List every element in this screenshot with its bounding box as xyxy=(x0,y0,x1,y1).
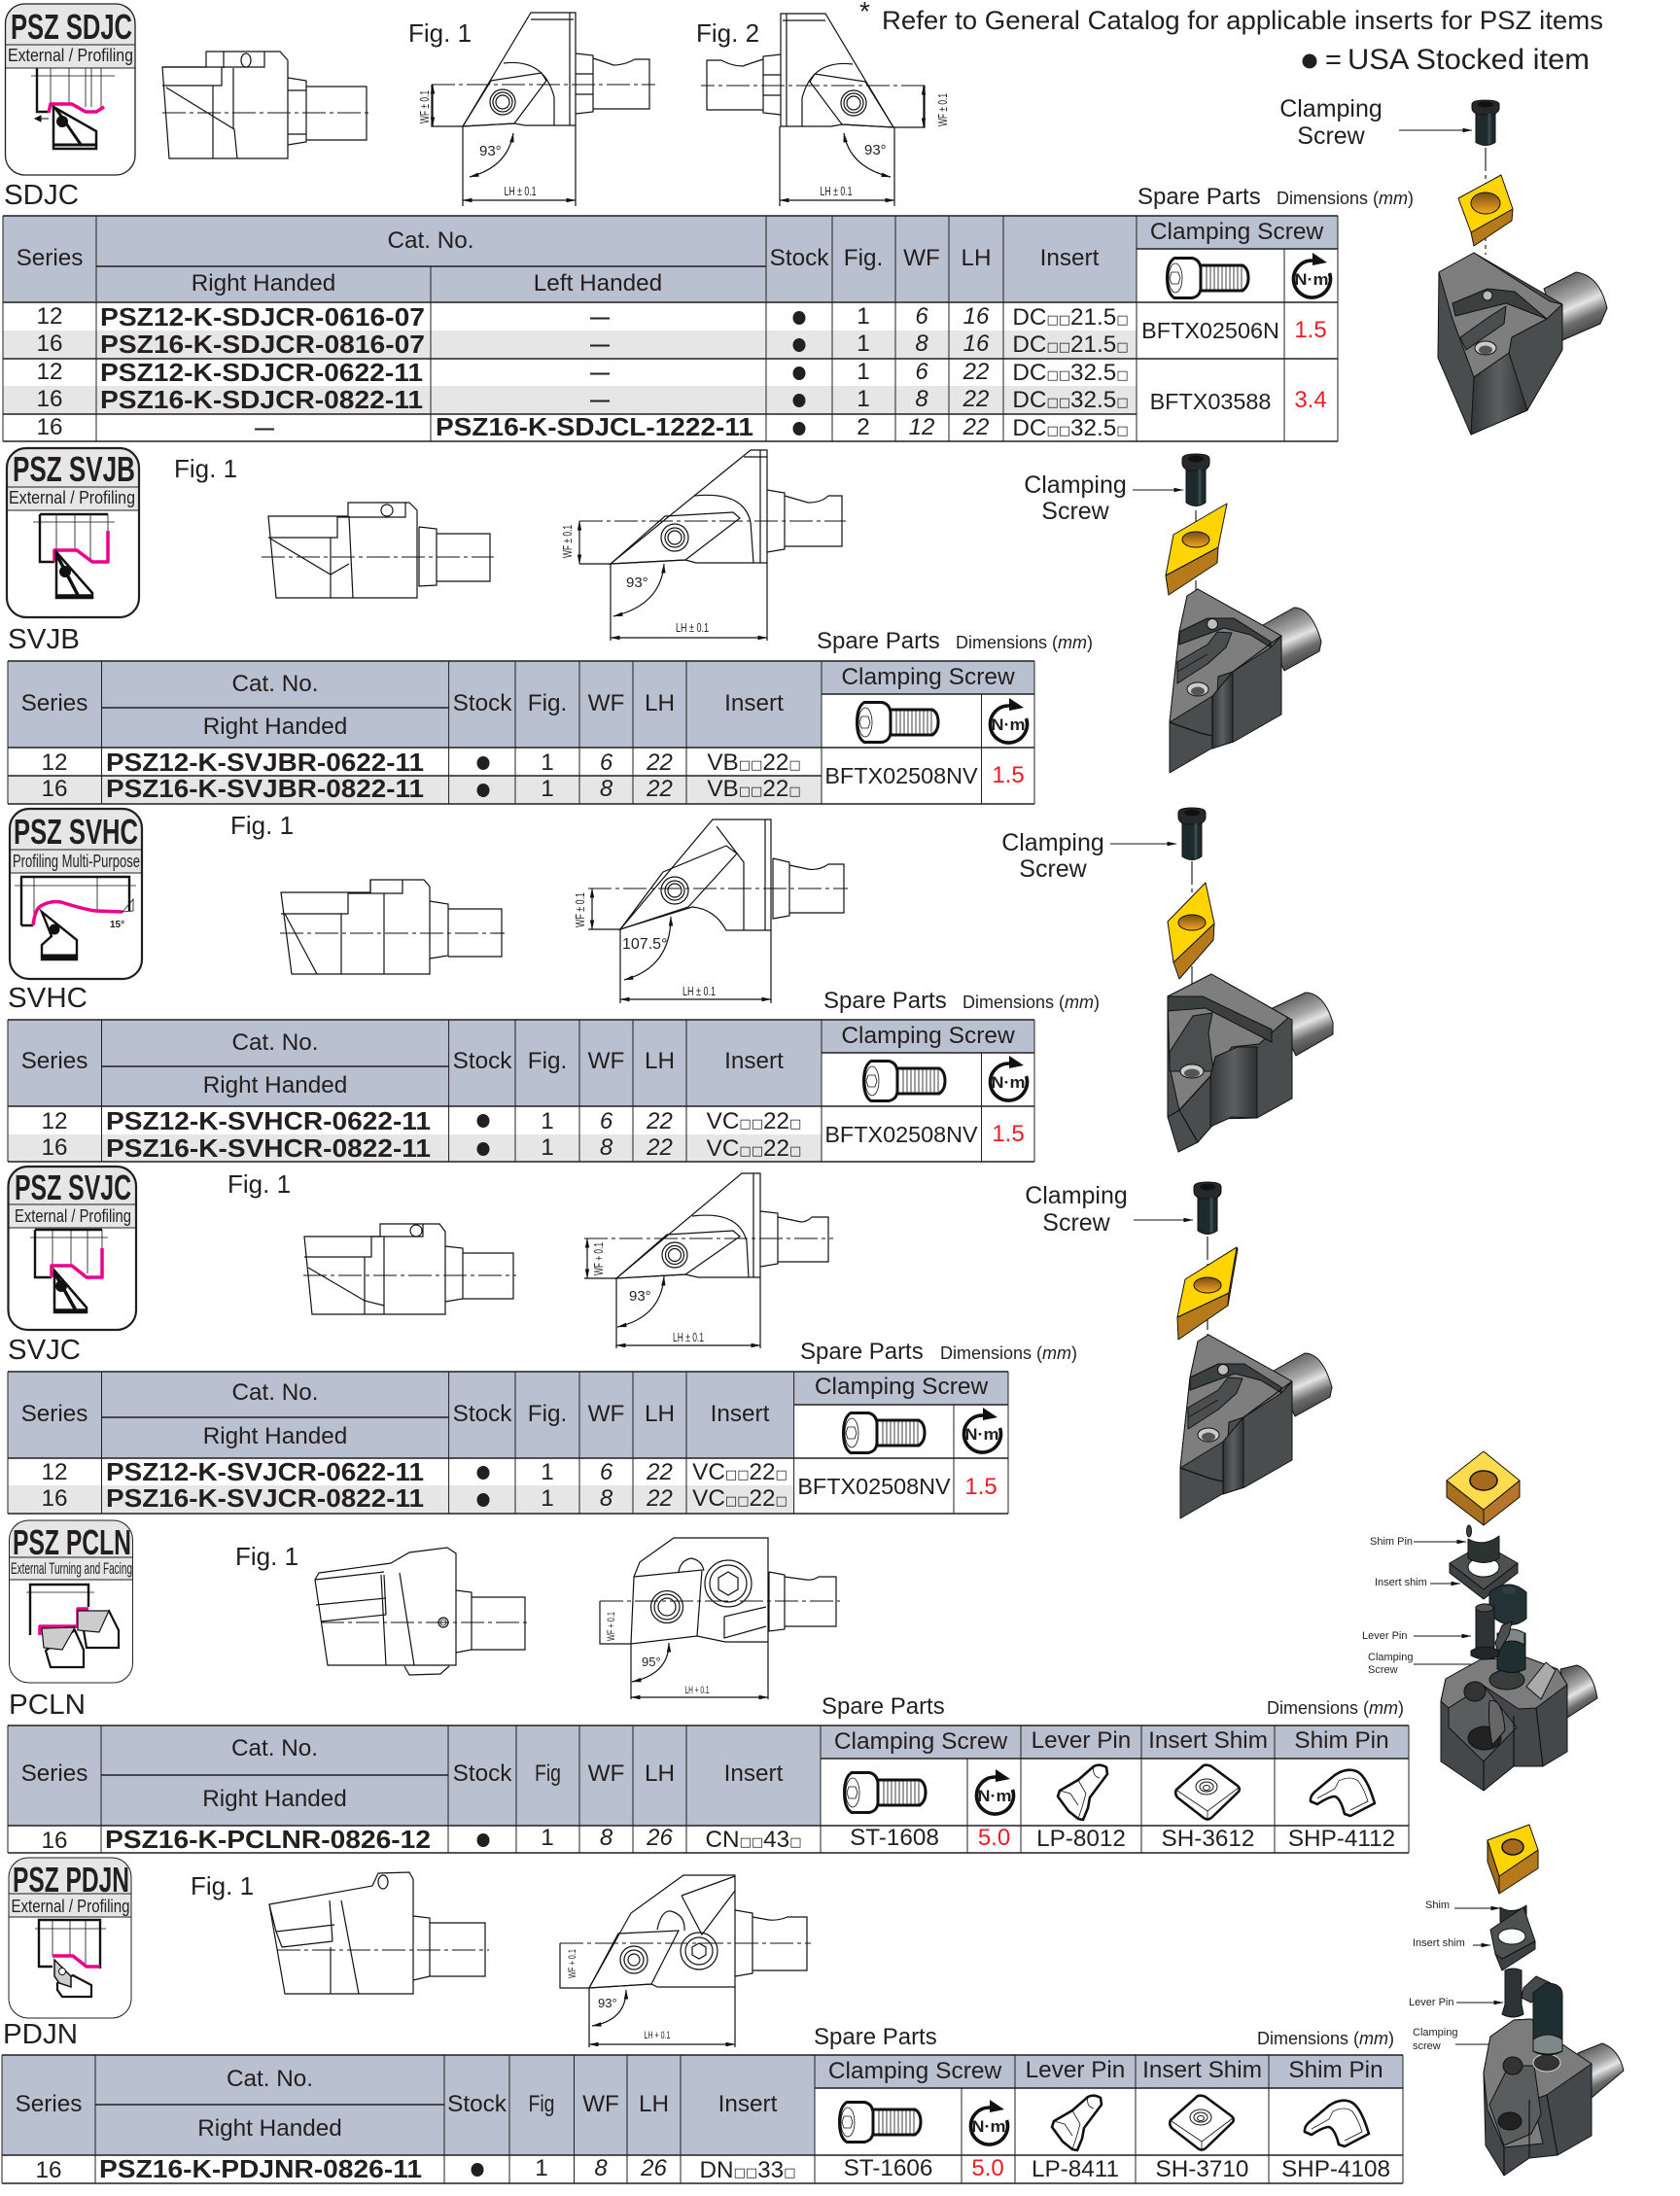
table: SVHC: PSZ16-K-SVHCR-0822-11 xyxy=(106,1133,431,1163)
table: SVHC: Right Handed xyxy=(203,1072,347,1098)
table: PCLN: ST-1608 xyxy=(850,1825,939,1851)
table: SDJC: 1 xyxy=(857,386,870,412)
table: SVJB: 22 xyxy=(646,776,673,802)
badge: PSZ SVJC: PSZ SVJC xyxy=(15,1168,131,1207)
table: SDJC: 22 xyxy=(962,386,989,412)
table: SVJC: 8 xyxy=(600,1485,613,1512)
section label: SVHC: SVHC xyxy=(8,983,88,1014)
table: SDJC: — xyxy=(590,334,610,356)
figure 1 drawing xyxy=(417,13,655,206)
figure label: Fig. 1: Fig. 1 xyxy=(191,1871,254,1900)
table: PCLN: SHP-4112 xyxy=(1288,1826,1395,1852)
table: SDJC: 22 xyxy=(962,414,989,440)
table: PDJN: Series xyxy=(16,2091,82,2117)
table: SVJC: PSZ16-K-SVJCR-0822-11 xyxy=(106,1483,424,1513)
figure 1 drawing: LH + 0.1 xyxy=(644,2030,671,2041)
table: PDJN: WF xyxy=(582,2091,619,2117)
table: SDJC: 12 xyxy=(909,414,934,440)
table: SDJC: Stock xyxy=(770,245,829,271)
spare parts heading: Spare Parts xyxy=(814,2024,937,2050)
callouts: parts labels xyxy=(1362,1536,1489,1676)
table: SVHC: Insert xyxy=(724,1048,784,1074)
callout: clamping screw: Clamping xyxy=(1024,471,1127,499)
table: PDJN: Fig xyxy=(529,2091,554,2117)
table: SVJC: 22 xyxy=(646,1459,673,1485)
side view drawing xyxy=(162,52,370,158)
callouts: parts labels: Insert shim xyxy=(1413,1937,1465,1949)
table: SVHC: VC□□22□ xyxy=(707,1108,801,1134)
exploded view: SVJC xyxy=(1177,1182,1332,1518)
spare parts heading xyxy=(817,628,1093,654)
exploded view: SVJB xyxy=(1166,454,1321,773)
table: SDJC: LH xyxy=(961,245,992,271)
table: SDJC: 22 xyxy=(962,359,989,385)
badge: PSZ SVJC xyxy=(8,1167,136,1330)
figure label: Fig. 1: Fig. 1 xyxy=(230,811,294,840)
table: SVHC: VC□□22□ xyxy=(707,1135,801,1162)
figure 1 drawing: WF + 0.1 xyxy=(591,1242,606,1275)
section label: SVJB: SVJB xyxy=(8,624,80,655)
table: SVHC: N·m xyxy=(992,1073,1025,1092)
exploded view: SDJC xyxy=(1438,100,1607,435)
table: SVJB: BFTX02508NV xyxy=(824,763,978,788)
callout: clamping screw: Clamping xyxy=(1279,95,1382,122)
badge: PSZ SDJC: PSZ SDJC xyxy=(11,7,132,47)
table: SDJC: — xyxy=(590,363,610,384)
table: SVHC xyxy=(8,1020,1034,1163)
table: SDJC: DC□□21.5□ xyxy=(1012,304,1129,331)
table: SVJC: Fig. xyxy=(528,1401,567,1427)
table: SVJC: BFTX02508NV xyxy=(797,1474,951,1499)
badge: PSZ SVHC: 15° xyxy=(110,920,124,930)
figure 1 drawing: LH ± 0.1 xyxy=(673,1330,704,1344)
badge: PSZ PDJN: External / Profiling xyxy=(12,1897,130,1916)
figure 2 drawing: LH ± 0.1 xyxy=(821,184,852,198)
spare parts heading: Dimensions (mm) xyxy=(940,1343,1077,1363)
figure 1 drawing: 93° xyxy=(629,1288,651,1305)
badge: PSZ SVJC: External / Profiling xyxy=(15,1206,131,1226)
figure label: Fig. 1: Fig. 1 xyxy=(235,1542,298,1571)
figure 1 drawing: WF ± 0.1 xyxy=(573,892,587,927)
table: SVJC: 1 xyxy=(541,1485,554,1512)
table: SDJC: DC□□21.5□ xyxy=(1012,331,1129,358)
spare parts heading xyxy=(822,1693,1404,1720)
callout: clamping screw: Screw xyxy=(1042,1209,1111,1237)
table: SVHC: Series xyxy=(21,1048,88,1074)
table: SVJC: 1.5 xyxy=(964,1474,998,1500)
table: SDJC: DC□□32.5□ xyxy=(1012,415,1129,441)
table: SVHC: PSZ12-K-SVHCR-0622-11 xyxy=(106,1106,431,1135)
section: PCLN xyxy=(8,1451,1597,1854)
spare parts heading: Spare Parts xyxy=(823,988,947,1014)
table: PDJN: Insert xyxy=(718,2091,778,2117)
table: SVHC: Fig. xyxy=(528,1048,567,1074)
table: SDJC: 16 xyxy=(36,386,63,412)
table: SVJB: Clamping Screw xyxy=(841,664,1015,690)
badge: PSZ SDJC: External / Profiling xyxy=(8,46,133,65)
table: SDJC xyxy=(3,216,1338,441)
table: SDJC: 16 xyxy=(36,414,63,440)
figure 1 drawing: WF + 0.1 xyxy=(567,1949,578,1978)
table: SVJB: Fig. xyxy=(528,690,567,716)
table: SVJB: VB□□22□ xyxy=(707,776,801,802)
table: SVJC: WF xyxy=(588,1401,624,1427)
table: PCLN: Insert Shim xyxy=(1148,1727,1268,1754)
figure 1 drawing xyxy=(584,1173,833,1348)
table: SDJC: PSZ16-K-SDJCL-1222-11 xyxy=(436,412,753,441)
callouts: parts labels: Lever Pin xyxy=(1409,1997,1453,2008)
table: SDJC: — xyxy=(590,390,610,411)
figure 2 drawing: 93° xyxy=(864,142,887,158)
table: SVHC: 1 xyxy=(541,1108,554,1134)
table: PCLN: SH-3612 xyxy=(1162,1826,1254,1852)
table: SDJC: 12 xyxy=(36,303,63,330)
table: PCLN: CN□□43□ xyxy=(706,1827,801,1853)
table: SVJC: Stock xyxy=(453,1401,512,1427)
callouts: parts labels: Screw xyxy=(1368,1664,1398,1676)
table: PCLN: 8 xyxy=(600,1825,613,1851)
table: PCLN xyxy=(8,1725,1409,1854)
table: SDJC: Left Handed xyxy=(534,270,662,296)
table: SDJC: 1.5 xyxy=(1294,317,1327,343)
table: SDJC: Series xyxy=(17,245,83,271)
table: PDJN: PSZ16-K-PDJNR-0826-11 xyxy=(99,2154,422,2183)
callouts: parts labels: screw xyxy=(1413,2040,1441,2052)
table: SVJC: N·m xyxy=(964,1425,999,1444)
badge: PSZ SDJC xyxy=(6,4,135,175)
figure label: Fig. 1: Fig. 1 xyxy=(228,1169,291,1199)
callout: clamping screw: Clamping xyxy=(1001,829,1104,856)
spare parts heading: Dimensions (mm) xyxy=(1277,189,1414,208)
table: SDJC: Fig. xyxy=(844,245,883,271)
table: SVJB: PSZ12-K-SVJBR-0622-11 xyxy=(106,748,424,777)
table: PCLN: N·m xyxy=(978,1787,1011,1805)
figure 1 drawing: 107.5° xyxy=(622,936,667,953)
spare parts heading xyxy=(1138,184,1414,210)
figure 2 drawing: WF ± 0.1 xyxy=(935,93,950,126)
side view drawing xyxy=(315,1548,530,1675)
table: SVJB xyxy=(8,661,1034,804)
spare parts heading: Spare Parts xyxy=(800,1339,924,1365)
table: SDJC: BFTX03588 xyxy=(1150,389,1271,414)
table: SDJC: Cat. No. xyxy=(387,227,474,254)
table: SVHC: Clamping Screw xyxy=(841,1023,1015,1049)
table: SVJB: PSZ16-K-SVJBR-0822-11 xyxy=(106,774,424,803)
exploded view: PCLN xyxy=(1441,1451,1597,1791)
badge: PSZ PCLN: PSZ PCLN xyxy=(13,1522,131,1562)
table: SDJC: Right Handed xyxy=(192,270,335,296)
legend: USA stocked item: = xyxy=(1325,45,1342,76)
table: SDJC: DC□□32.5□ xyxy=(1012,387,1129,413)
section: SVJC xyxy=(8,1167,1332,1518)
table: PDJN: 5.0 xyxy=(971,2155,1004,2181)
table: SVJB: 16 xyxy=(41,776,68,802)
table: SDJC: WF xyxy=(903,245,940,271)
callout: clamping screw xyxy=(1279,95,1472,150)
spare parts heading: Dimensions (mm) xyxy=(1267,1698,1404,1718)
table: SVJB: 1.5 xyxy=(992,762,1025,788)
table: SVJB: LH xyxy=(645,690,675,716)
table: SVHC: BFTX02508NV xyxy=(824,1122,978,1147)
table: SVJB: VB□□22□ xyxy=(707,749,801,776)
table: SVJC xyxy=(8,1372,1008,1514)
section label: PCLN: PCLN xyxy=(9,1690,86,1721)
table: SVJB: Insert xyxy=(724,690,784,716)
table: PDJN: DN□□33□ xyxy=(700,2157,795,2183)
callouts: parts labels: Clamping xyxy=(1413,2027,1457,2039)
table: SVJC: PSZ12-K-SVJCR-0622-11 xyxy=(106,1457,424,1486)
table: SVHC: Stock xyxy=(453,1048,512,1074)
figure 1 drawing: LH ± 0.1 xyxy=(676,620,709,635)
spare parts heading xyxy=(814,2024,1394,2050)
figure 1 drawing: WF ± 0.1 xyxy=(560,525,575,558)
table: SDJC: PSZ12-K-SDJCR-0622-11 xyxy=(100,358,423,387)
table: SDJC: DC□□32.5□ xyxy=(1012,360,1129,386)
callout: clamping screw xyxy=(1025,1182,1193,1237)
side view drawing xyxy=(280,880,505,974)
table: SDJC: N·m xyxy=(1295,270,1328,289)
table: PCLN: Insert xyxy=(724,1760,784,1787)
table: PDJN: 16 xyxy=(35,2157,62,2183)
table: SVHC: 6 xyxy=(600,1108,613,1134)
table: PCLN: Stock xyxy=(453,1760,512,1787)
figure 1 drawing xyxy=(573,819,848,1003)
figure label: Fig. 1: Fig. 1 xyxy=(174,454,237,483)
table: SVJC: Right Handed xyxy=(203,1423,347,1449)
figure 1 drawing xyxy=(560,1875,811,2047)
table: PDJN: Stock xyxy=(447,2091,508,2117)
callouts: parts labels: Clamping xyxy=(1368,1652,1413,1663)
table: PDJN: Lever Pin xyxy=(1026,2057,1125,2083)
figure 1 drawing: WF ± 0.1 xyxy=(417,90,432,123)
badge: PSZ SVHC xyxy=(10,809,142,979)
table: SVHC: 1.5 xyxy=(992,1121,1025,1147)
table: PCLN: Fig xyxy=(535,1760,561,1787)
callout: clamping screw: Screw xyxy=(1297,122,1366,150)
table: PCLN: 16 xyxy=(41,1828,68,1854)
section: SVJB xyxy=(7,448,1321,804)
table: SDJC: 16 xyxy=(36,331,63,357)
table: PCLN: WF xyxy=(588,1760,624,1787)
spare parts heading: Dimensions (mm) xyxy=(962,993,1100,1012)
table: SVJB: 1 xyxy=(541,776,554,802)
table: SDJC: PSZ16-K-SDJCR-0822-11 xyxy=(100,385,423,414)
table: PCLN: Cat. No. xyxy=(231,1735,318,1761)
table: SDJC: — xyxy=(255,418,274,439)
callout: clamping screw: Clamping xyxy=(1025,1182,1128,1209)
table: PDJN: 1 xyxy=(535,2155,548,2181)
table: PDJN: SHP-4108 xyxy=(1281,2156,1390,2182)
table: SDJC: 6 xyxy=(915,303,928,330)
table: PDJN: Cat. No. xyxy=(227,2066,313,2092)
exploded view: SVHC xyxy=(1168,808,1333,1152)
table: PCLN: Series xyxy=(21,1760,88,1787)
table: SVJB: Cat. No. xyxy=(231,671,319,697)
legend: USA stocked item: USA Stocked item xyxy=(1348,44,1590,76)
spare parts heading: Dimensions (mm) xyxy=(1257,2029,1394,2048)
callout: clamping screw: Screw xyxy=(1019,855,1088,883)
figure 1 drawing: 95° xyxy=(642,1655,661,1669)
table: SDJC: BFTX02506N xyxy=(1141,318,1279,343)
figure label: Fig. 2: Fig. 2 xyxy=(696,18,759,48)
table: SDJC: 8 xyxy=(915,331,928,357)
table: SDJC: PSZ16-K-SDJCR-0816-07 xyxy=(100,330,425,359)
spare parts heading xyxy=(800,1339,1077,1365)
table: SVJC: Cat. No. xyxy=(231,1379,319,1406)
table: SVJC: VC□□22□ xyxy=(692,1485,788,1512)
table: SVJB: 22 xyxy=(646,749,673,776)
table: PDJN: N·m xyxy=(972,2117,1005,2136)
callout: clamping screw: Screw xyxy=(1041,498,1110,525)
spare parts heading: Dimensions (mm) xyxy=(956,633,1093,652)
figure label: Fig. 1: Fig. 1 xyxy=(408,18,472,48)
figure 1 drawing xyxy=(600,1538,840,1699)
table: PCLN: Shim Pin xyxy=(1294,1727,1389,1754)
table: SVJC: Clamping Screw xyxy=(815,1374,988,1400)
table: SDJC: 16 xyxy=(963,331,990,357)
table: SVJC: 22 xyxy=(646,1485,673,1512)
table: SVJB: 12 xyxy=(41,749,68,776)
table: SVJB: Stock xyxy=(453,690,512,716)
table: SDJC: 1 xyxy=(857,331,870,357)
table: SVHC: LH xyxy=(645,1048,675,1074)
table: PCLN: 5.0 xyxy=(978,1825,1010,1851)
badge: PSZ PDJN xyxy=(9,1858,131,2018)
callout: clamping screw xyxy=(1024,471,1183,525)
table: PDJN xyxy=(2,2055,1403,2183)
table: PDJN: SH-3710 xyxy=(1156,2156,1248,2182)
section label: SVJC: SVJC xyxy=(8,1335,81,1366)
table: SVHC: 22 xyxy=(646,1134,673,1161)
spare parts heading: Spare Parts xyxy=(822,1693,945,1720)
callouts: parts labels: Lever Pin xyxy=(1362,1630,1407,1642)
table: SVJB: 6 xyxy=(600,749,613,776)
table: SDJC: 6 xyxy=(915,359,928,385)
table: SVJC: 16 xyxy=(41,1485,68,1512)
section label: SDJC: SDJC xyxy=(4,180,79,211)
table: SDJC: PSZ12-K-SDJCR-0616-07 xyxy=(100,302,425,331)
table: SDJC: 16 xyxy=(963,303,990,330)
spare parts heading xyxy=(823,988,1100,1014)
side view drawing xyxy=(269,1872,489,1994)
section: SDJC xyxy=(3,4,1607,441)
badge: PSZ PCLN xyxy=(10,1520,132,1683)
table: SVJB: Right Handed xyxy=(203,714,347,740)
table: SVJB: Series xyxy=(21,690,88,716)
table: SDJC: — xyxy=(590,307,610,329)
badge: PSZ SVJB: External / Profiling xyxy=(9,488,135,507)
table: SDJC: 1 xyxy=(857,359,870,385)
table: SVHC: 1 xyxy=(541,1134,554,1161)
table: PCLN: Right Handed xyxy=(202,1786,347,1812)
figure 1 drawing: 93° xyxy=(626,575,648,591)
section: PDJN xyxy=(2,1825,1624,2183)
badge: PSZ SVJB: PSZ SVJB xyxy=(13,449,135,489)
badge: PSZ SVJB xyxy=(7,448,139,617)
figure 1 drawing: WF + 0.1 xyxy=(606,1612,617,1641)
table: SVJB: 1 xyxy=(541,749,554,776)
table: PDJN: Right Handed xyxy=(197,2115,342,2142)
table: PDJN: Insert Shim xyxy=(1142,2057,1262,2083)
callouts: parts labels xyxy=(1409,1900,1533,2052)
section: SVHC xyxy=(8,808,1333,1163)
table: PDJN: Clamping Screw xyxy=(828,2058,1001,2084)
table: SVJC: Series xyxy=(21,1401,88,1427)
table: PDJN: ST-1606 xyxy=(844,2155,932,2181)
table: PDJN: LP-8411 xyxy=(1032,2156,1119,2182)
spare parts heading: Spare Parts xyxy=(1138,184,1261,210)
table: SDJC: 2 xyxy=(857,414,870,440)
table: SVHC: 12 xyxy=(41,1108,68,1134)
table: PCLN: Clamping Screw xyxy=(834,1728,1007,1755)
table: SVJC: VC□□22□ xyxy=(692,1459,788,1485)
table: SVJC: 1 xyxy=(541,1459,554,1485)
figure 2 drawing xyxy=(701,14,950,206)
badge: PSZ SVHC: Profiling Multi-Purpose xyxy=(13,852,140,871)
table: SVJC: 6 xyxy=(600,1459,613,1485)
figure 1 drawing: 93° xyxy=(598,1996,617,2010)
table: SDJC: 8 xyxy=(915,386,928,412)
table: SDJC: Clamping Screw xyxy=(1150,219,1323,245)
badge: PSZ PCLN: External Turning and Facing xyxy=(11,1559,132,1578)
side view drawing xyxy=(303,1224,516,1314)
table: PDJN: LH xyxy=(639,2091,669,2117)
table: SVHC: 16 xyxy=(41,1134,68,1161)
table: PDJN: 26 xyxy=(640,2155,667,2181)
table: PCLN: 26 xyxy=(646,1825,673,1851)
table: SDJC: 1 xyxy=(857,303,870,330)
table: PCLN: Lever Pin xyxy=(1032,1727,1131,1754)
table: SVJC: 12 xyxy=(41,1459,68,1485)
figure 1 drawing: LH ± 0.1 xyxy=(682,984,716,998)
table: SVHC: WF xyxy=(588,1048,624,1074)
section label: PDJN: PDJN xyxy=(3,2019,78,2050)
table: SVJC: Insert xyxy=(711,1401,770,1427)
table: PCLN: LH xyxy=(645,1760,675,1787)
spare parts heading: Spare Parts xyxy=(817,628,940,654)
table: PCLN: PSZ16-K-PCLNR-0826-12 xyxy=(105,1825,431,1854)
figure 1 drawing: LH ± 0.1 xyxy=(504,184,537,198)
figure 1 drawing xyxy=(560,450,846,641)
callouts: parts labels: Shim xyxy=(1425,1900,1450,1911)
table: SVJB: N·m xyxy=(992,715,1025,734)
table: SVHC: Cat. No. xyxy=(231,1029,319,1056)
callouts: parts labels: Insert shim xyxy=(1375,1577,1427,1588)
badge: PSZ SVHC: PSZ SVHC xyxy=(14,812,138,852)
table: SDJC: 3.4 xyxy=(1294,387,1327,413)
table: SDJC: Insert xyxy=(1040,245,1100,271)
side view drawing xyxy=(262,503,494,598)
table: SVHC: 22 xyxy=(646,1108,673,1134)
exploded view: PDJN xyxy=(1484,1825,1624,2176)
table: SDJC: 12 xyxy=(36,359,63,385)
table: SVJB: WF xyxy=(588,690,624,716)
table: PCLN: 1 xyxy=(541,1825,554,1851)
table: SVHC: 8 xyxy=(600,1134,613,1161)
table: PDJN: 8 xyxy=(594,2155,608,2181)
note: general catalog: Refer to General Catalog for applicable inserts for PSZ items xyxy=(882,6,1603,35)
table: PCLN: LP-8012 xyxy=(1036,1826,1126,1852)
table: PDJN: Shim Pin xyxy=(1288,2057,1383,2083)
figure 1 drawing: LH + 0.1 xyxy=(684,1685,710,1696)
table: SVJB: 8 xyxy=(600,776,613,802)
callouts: parts labels: Shim Pin xyxy=(1370,1536,1413,1548)
badge: PSZ PDJN: PSZ PDJN xyxy=(13,1860,129,1900)
table: SVJC: LH xyxy=(645,1401,675,1427)
callout: clamping screw xyxy=(1001,829,1176,883)
figure 1 drawing: 93° xyxy=(479,143,502,159)
